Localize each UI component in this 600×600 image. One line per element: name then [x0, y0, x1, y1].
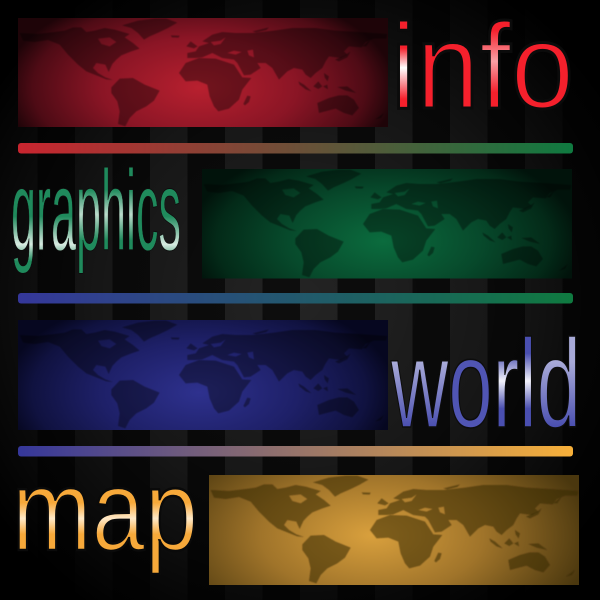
map: blue panel continents: [20, 321, 387, 428]
divider bar: red to green: [18, 143, 573, 154]
panel: gold world map: [209, 475, 579, 585]
divider bar: blue to orange: [18, 446, 573, 456]
heading: graphics: graphics: [11, 148, 181, 275]
heading: world: world: [390, 315, 581, 454]
heading: info: info: [391, 0, 574, 134]
panel: red world map: [18, 18, 388, 127]
panel: blue world map: [18, 320, 388, 430]
map: gold panel continents: [211, 476, 578, 583]
map: green panel continents: [204, 170, 571, 277]
panel: green world map: [202, 169, 572, 278]
divider bar: blue to green: [18, 293, 573, 304]
heading: map: map: [12, 447, 198, 575]
map: red panel continents: [20, 19, 387, 126]
